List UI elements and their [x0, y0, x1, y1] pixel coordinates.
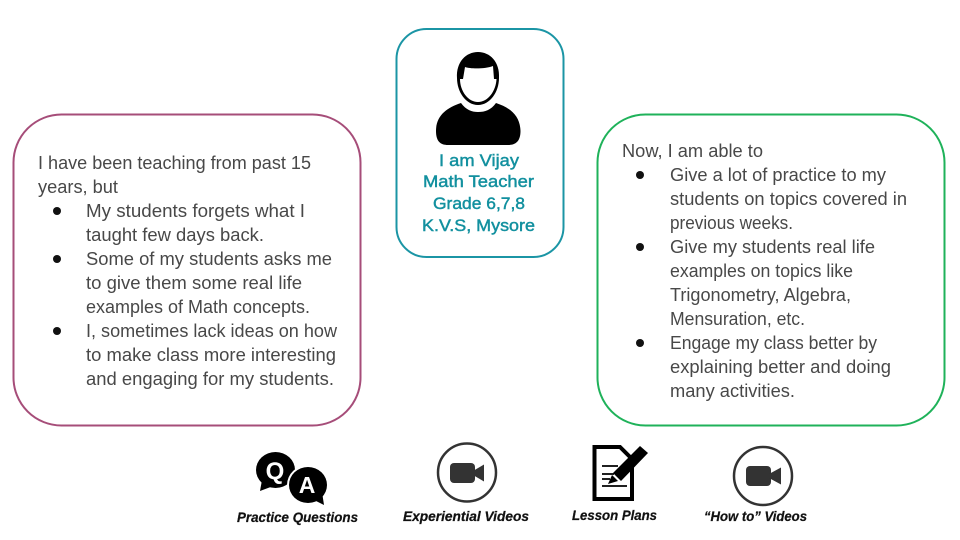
text: before intro and bullets: Some of my students asks me [86, 249, 332, 269]
resource: practice questions [237, 452, 358, 525]
text: after intro and bullets: students on topics covered in [670, 189, 907, 209]
resource: how to videos [704, 447, 807, 524]
panel: teacher profile [396, 29, 564, 257]
text: before intro and bullets: I, sometimes lack ideas on how [86, 321, 338, 341]
text: after intro and bullets: examples on topics like [670, 261, 853, 281]
text: before intro and bullets: I have been teaching from past 15 [38, 153, 311, 173]
teacher details: Math Teacher [423, 172, 534, 191]
icon: Q and A speech bubbles: Q [266, 458, 284, 485]
text: after intro and bullets: Now, I am able to [622, 141, 763, 161]
icon: teacher avatar [436, 52, 520, 145]
text: after intro and bullets: explaining better and doing [670, 357, 891, 377]
teacher details: I am Vijay [439, 151, 520, 170]
icon: video camera [438, 444, 496, 502]
text: before intro and bullets: taught few days back. [86, 225, 264, 245]
text: after intro and bullets: Trigonometry, Algebra, [670, 285, 851, 305]
text: before intro and bullets: years, but [38, 177, 118, 197]
text: after intro and bullets [622, 141, 907, 401]
resource: practice questions: Practice Questions [237, 509, 358, 525]
resource: how to videos: “How to” Videos [704, 508, 807, 524]
text: before intro and bullets: to make class more interesting [86, 345, 336, 365]
text: before intro and bullets: to give them some real life [86, 273, 302, 293]
resource: experiential videos [403, 444, 529, 524]
text: before intro and bullets: and engaging for my students. [86, 369, 334, 389]
resource: lesson plans: Lesson Plans [572, 507, 657, 523]
panel: after [598, 114, 944, 426]
text: after intro and bullets: many activities. [670, 381, 795, 401]
icon: video camera [734, 447, 792, 505]
teacher details: Grade 6,7,8 [433, 194, 525, 213]
text: before intro and bullets: examples of Math concepts. [86, 297, 310, 317]
resource: lesson plans [572, 446, 657, 523]
text: before intro and bullets [38, 153, 338, 389]
resource: experiential videos: Experiential Videos [403, 508, 529, 524]
text: after intro and bullets: previous weeks. [670, 213, 793, 233]
teacher details [422, 151, 535, 235]
panel: before [14, 114, 360, 426]
text: after intro and bullets: Engage my class better by [670, 333, 877, 353]
text: after intro and bullets: Give my students real life [670, 237, 875, 257]
icon: document and pencil [594, 446, 648, 499]
icon: Q and A speech bubbles [256, 452, 329, 505]
text: after intro and bullets: Mensuration, etc. [670, 309, 805, 329]
text: after intro and bullets: Give a lot of practice to my [670, 165, 886, 185]
text: before intro and bullets: My students forgets what I [86, 201, 305, 221]
teacher details: K.V.S, Mysore [422, 216, 535, 235]
icon: Q and A speech bubbles: A [299, 472, 315, 498]
